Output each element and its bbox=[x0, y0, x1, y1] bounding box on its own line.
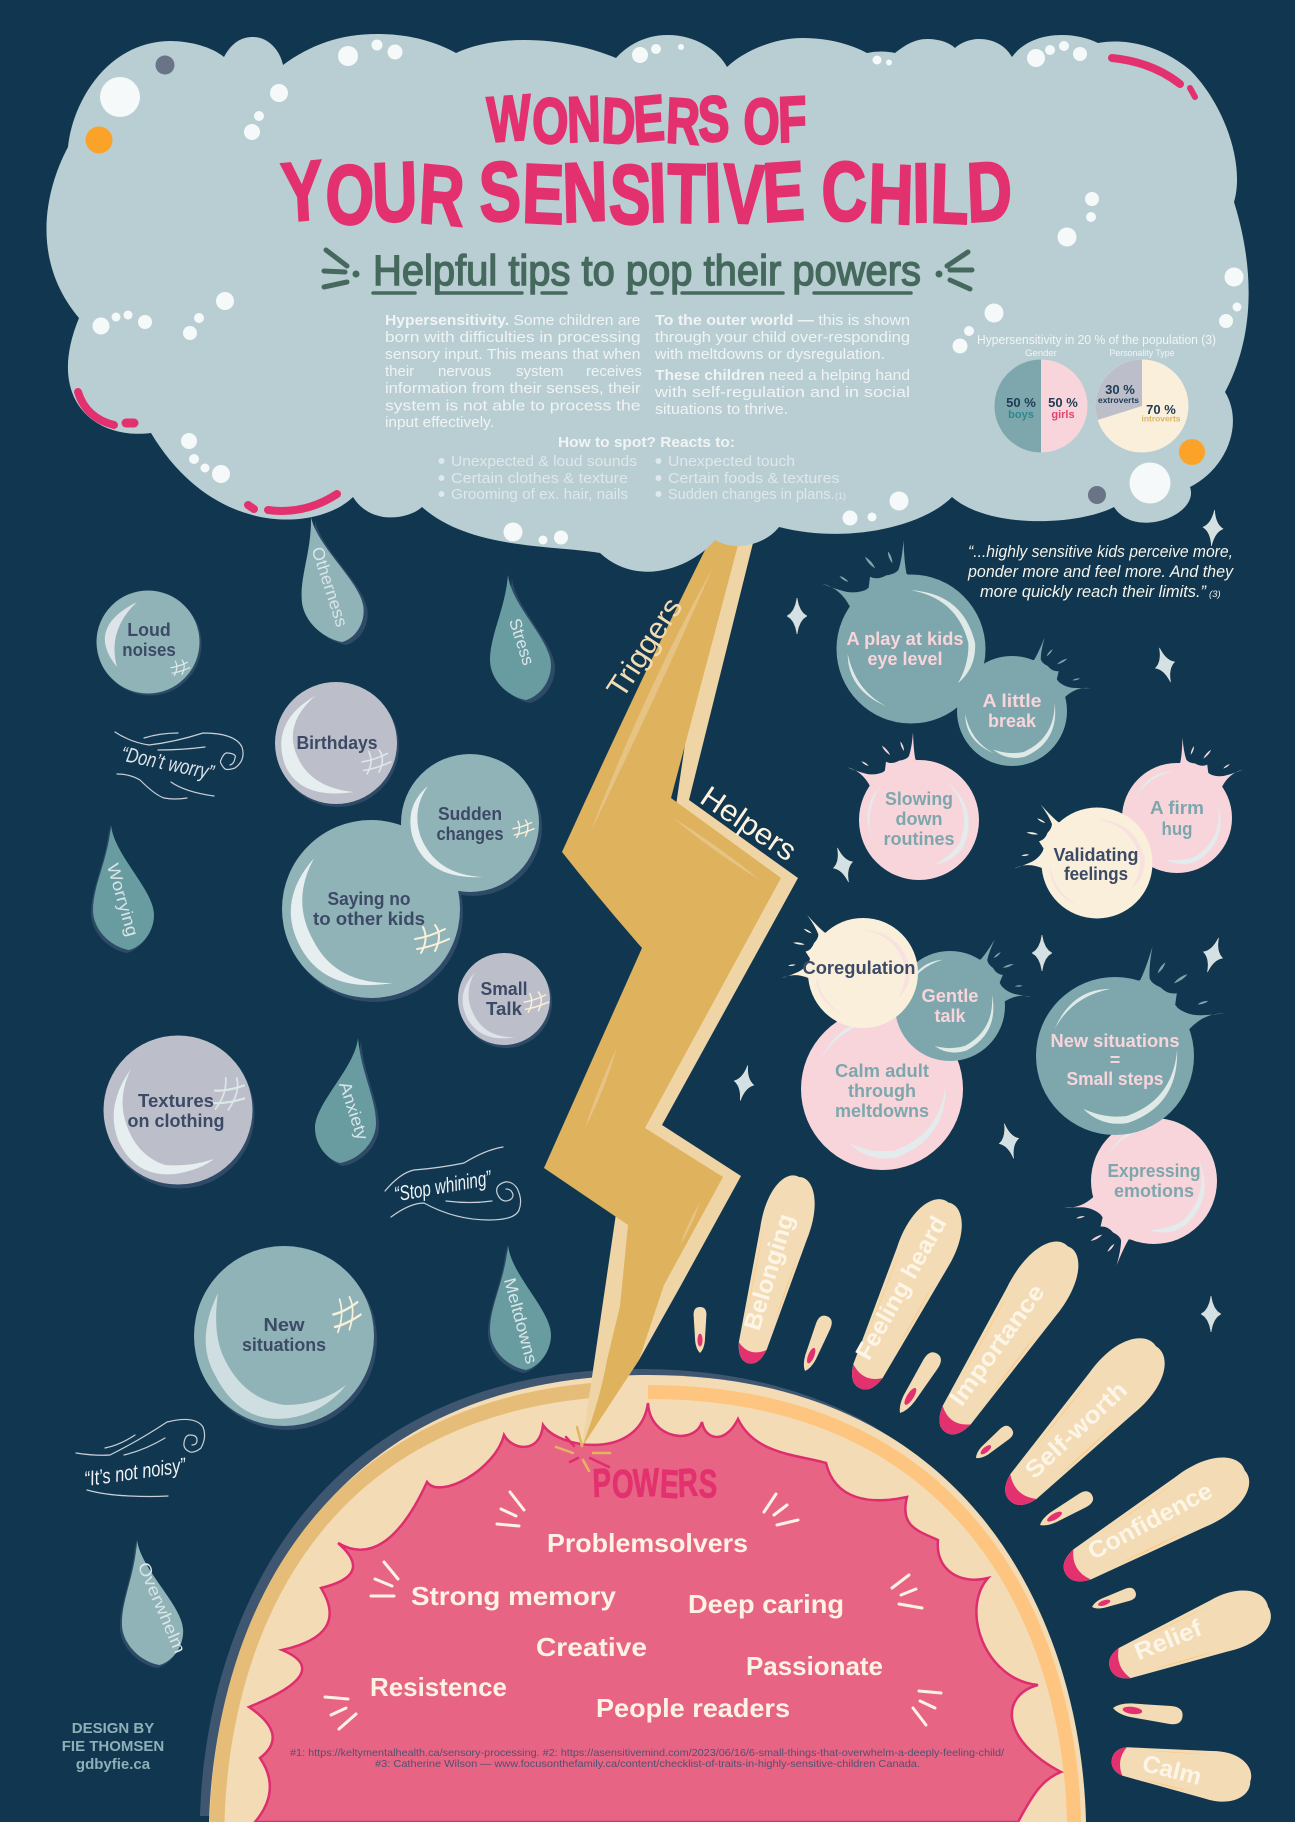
bubble: Expressing emotions: emotions bbox=[1114, 1181, 1194, 1201]
cloud panel bbox=[46, 34, 1249, 572]
drop: Worrying bbox=[91, 825, 154, 953]
bullets bbox=[438, 458, 662, 497]
speech: It's not noisy bbox=[76, 1419, 205, 1496]
pie: personality type: 70 % bbox=[1146, 402, 1176, 417]
drop: Worrying: Worrying bbox=[103, 861, 142, 939]
finger: Relief: Relief bbox=[1131, 1614, 1207, 1666]
text block: how to spot: (1) bbox=[835, 491, 846, 501]
footnotes: #3: Catherine Wilson — www.focusonthefamily.ca/content/checklist-of-traits-in-highly-sensitive-children Canada. bbox=[375, 1758, 920, 1770]
pie: gender: boys bbox=[1008, 409, 1034, 421]
text block: hypersensitivity: system bbox=[516, 363, 564, 380]
finger: Relief bbox=[1100, 1581, 1279, 1695]
text block: hypersensitivity: system is not able to process the bbox=[385, 398, 640, 414]
drop: Meltdowns: Meltdowns bbox=[500, 1276, 541, 1366]
finger: Calm bbox=[1108, 1735, 1254, 1806]
small fingers bbox=[694, 1307, 1184, 1725]
bolt label: Triggers: Triggers bbox=[601, 592, 689, 704]
text block: how to spot bbox=[438, 434, 846, 503]
cloud red accent strokes bbox=[78, 58, 1195, 511]
powers list bbox=[370, 1528, 883, 1723]
bubble: Gentle talk bbox=[895, 928, 1047, 1061]
bubble: A play at kids eye level bbox=[822, 540, 986, 724]
powers list: Resistence bbox=[370, 1672, 507, 1702]
pie: personality type: 30 % bbox=[1105, 382, 1135, 397]
bubble: Gentle talk: Gentle bbox=[922, 986, 978, 1006]
quote: more quickly reach their limits.” bbox=[980, 582, 1207, 601]
bubble: Textures on clothing bbox=[104, 1036, 254, 1188]
bubble: Textures on clothing: Textures bbox=[138, 1091, 214, 1111]
speech: Don't worry: “Don’t worry” bbox=[119, 743, 216, 785]
bubble: A little break: A little bbox=[982, 691, 1042, 711]
bubble: A firm hug: A firm bbox=[1150, 798, 1204, 818]
drop: Anxiety bbox=[315, 1038, 379, 1166]
bubble: Calm adult through meltdowns: Calm adult bbox=[835, 1061, 929, 1081]
bubble: New situations: situations bbox=[242, 1335, 326, 1355]
bubble: Slowing down routines: down bbox=[896, 809, 942, 829]
finger: Confidence bbox=[1051, 1444, 1260, 1600]
bubble: Slowing down routines bbox=[847, 732, 989, 880]
text block: hypersensitivity: born with difficulties in processing bbox=[385, 329, 640, 346]
pie: personality type: introverts bbox=[1142, 414, 1181, 424]
bubble: New situations bbox=[194, 1246, 377, 1430]
bubble: Loud noises bbox=[96, 590, 202, 696]
finger: Feeling heard bbox=[834, 1190, 974, 1400]
speech: Stop whining bbox=[385, 1147, 521, 1220]
text block: hypersensitivity: sensory input. This means that when bbox=[385, 346, 640, 363]
pie: personality type: extroverts bbox=[1098, 395, 1139, 405]
panel: powers dome bbox=[200, 1369, 1086, 1822]
finger: Self-worth bbox=[987, 1324, 1179, 1522]
bubble: Validating feelings: Validating bbox=[1054, 845, 1138, 865]
bubble: A little break: break bbox=[988, 711, 1037, 731]
text block: how to spot: Grooming of ex. hair, nails bbox=[451, 486, 628, 503]
helpers: A play at kids and A little break bbox=[822, 540, 1101, 766]
bubble: Validating feelings bbox=[994, 790, 1152, 918]
bubble: New situations = Small steps bbox=[1036, 938, 1236, 1135]
pie: gender bbox=[994, 360, 1088, 452]
powers list: Passionate bbox=[746, 1651, 883, 1681]
quote: ponder more and feel more. And they bbox=[967, 562, 1234, 581]
bubble: Calm adult through meltdowns: meltdowns bbox=[835, 1101, 929, 1121]
bubble: New situations: New bbox=[264, 1315, 306, 1335]
bubble: Gentle talk: talk bbox=[934, 1006, 966, 1026]
bubble: Textures on clothing: on clothing bbox=[128, 1111, 224, 1131]
bubble: Loud noises: noises bbox=[122, 640, 176, 660]
text block: hypersensitivity: input effectively. bbox=[385, 414, 494, 431]
bubble: Validating feelings: feelings bbox=[1064, 864, 1128, 884]
speech: Stop whining: “Stop whining” bbox=[393, 1167, 494, 1206]
sparkles bbox=[730, 509, 1228, 1332]
bubble: A firm hug bbox=[1122, 738, 1243, 873]
finger: Self-worth: Self-worth bbox=[1020, 1377, 1133, 1484]
credit: FIE THOMSEN bbox=[62, 1738, 164, 1755]
pie: gender: 50 % bbox=[1048, 395, 1078, 410]
text block: hypersensitivity: information from their senses, their bbox=[385, 380, 640, 397]
bubbles: Saying no and Sudden changes bbox=[282, 754, 542, 1002]
bubble: Sudden changes bbox=[401, 754, 539, 892]
text block: outer world: situations to thrive. bbox=[655, 401, 788, 418]
speech: Don't worry bbox=[115, 732, 243, 799]
text block: outer world: with meltdowns or dysregulation. bbox=[654, 346, 885, 363]
footnotes: #1: https://keltymentalhealth.ca/sensory-processing. #2: https://asensitivemind.com/2023/06/16/6-small-things-that-overwhelm-a-deeply-feeling-child/ bbox=[290, 1747, 1004, 1759]
text block: outer world: These children need a helping hand bbox=[655, 367, 910, 384]
bubble: A play at kids eye level: A play at kids bbox=[846, 629, 964, 649]
drop: Stress: Stress bbox=[505, 616, 538, 668]
bubble: Saying no: to other kids bbox=[313, 909, 425, 929]
bubble: Sudden changes: changes bbox=[436, 824, 504, 844]
bubble: Slowing down routines: Slowing bbox=[885, 789, 953, 809]
pie: gender: girls bbox=[1051, 409, 1075, 421]
subtitle left ticks bbox=[324, 250, 360, 287]
quote: (3) bbox=[1209, 589, 1221, 600]
text block: hypersensitivity: Hypersensitivity. Some children are bbox=[385, 312, 640, 329]
drop: Stress bbox=[490, 575, 555, 703]
bubble: Birthdays: Birthdays bbox=[296, 733, 378, 753]
bubble: Slowing down routines: routines bbox=[884, 829, 954, 849]
title bbox=[278, 82, 1014, 243]
chart: hypersensitivity pies bbox=[977, 332, 1216, 452]
finger: Feeling heard: Feeling heard bbox=[851, 1212, 952, 1365]
finger: Importance: Importance bbox=[944, 1280, 1050, 1411]
pie: personality type bbox=[1096, 360, 1188, 452]
bubble: Saying no: Saying no bbox=[328, 889, 410, 909]
drop: Otherness bbox=[293, 517, 371, 645]
text block: outer world: through your child over-responding bbox=[655, 329, 910, 346]
powers list: Deep caring bbox=[688, 1589, 844, 1619]
bubble: Expressing emotions: Expressing bbox=[1108, 1161, 1200, 1181]
credit bbox=[62, 1720, 164, 1773]
text block: outer world bbox=[654, 312, 910, 418]
bubble: Sudden changes: Sudden bbox=[438, 804, 502, 824]
bubble: New situations = Small steps: Small steps bbox=[1066, 1069, 1164, 1089]
title line 2: YOUR SENSITIVE CHILD bbox=[278, 143, 1014, 243]
powers list: Problemsolvers bbox=[547, 1528, 748, 1558]
text block: hypersensitivity: their bbox=[385, 363, 414, 380]
pink scalloped centre bbox=[249, 1403, 1061, 1822]
bubble: A play at kids eye level: eye level bbox=[868, 649, 942, 669]
bubble: New situations = Small steps: New situations bbox=[1050, 1031, 1180, 1051]
text block: how to spot: Sudden changes in plans. bbox=[668, 486, 834, 503]
credit: gdbyfie.ca bbox=[76, 1756, 151, 1773]
powers burst ticks bbox=[325, 1492, 941, 1729]
pie: gender: 50 % bbox=[1006, 395, 1036, 410]
speech: It's not noisy: “It’s not noisy” bbox=[83, 1454, 188, 1491]
text block: how to spot: Unexpected & loud sounds bbox=[451, 453, 637, 470]
chart: hypersensitivity pies: Hypersensitivity in 20 % of the population (3) bbox=[977, 332, 1216, 347]
finger: Importance bbox=[921, 1230, 1092, 1448]
drop: Overwhelm: Overwhelm bbox=[134, 1559, 189, 1656]
finger: Belonging bbox=[724, 1170, 823, 1370]
bubble: Small Talk: Small bbox=[480, 979, 528, 999]
text block: outer world: with self-regulation and in social bbox=[654, 384, 910, 401]
drop: Anxiety: Anxiety bbox=[335, 1079, 372, 1143]
bubble: Saying no bbox=[282, 820, 460, 998]
text block: hypersensitivity bbox=[385, 312, 642, 431]
impact spark at bolt tip bbox=[556, 1427, 610, 1471]
finger: Belonging: Belonging bbox=[739, 1211, 800, 1333]
bubble: Coregulation bbox=[761, 901, 918, 1028]
subtitle right ticks bbox=[936, 252, 972, 289]
powers list: Creative bbox=[536, 1632, 647, 1662]
cloud decorative dots bbox=[86, 40, 1244, 544]
text block: hypersensitivity: receives bbox=[586, 363, 642, 380]
title line 1: WONDERS OF bbox=[485, 82, 807, 158]
quote bbox=[967, 542, 1234, 601]
bolt label: Helpers: Helpers bbox=[694, 780, 802, 868]
quote: “...highly sensitive kids perceive more, bbox=[968, 542, 1233, 561]
text block: how to spot: Unexpected touch bbox=[668, 453, 795, 470]
lightning bolt bbox=[544, 530, 798, 1447]
bubble: Loud noises: Loud bbox=[127, 620, 171, 640]
subtitle underlines bbox=[373, 291, 911, 295]
finger: Calm: Calm bbox=[1140, 1750, 1204, 1791]
chart: hypersensitivity pies: Personality Type bbox=[1110, 348, 1174, 359]
text block: how to spot: Certain foods & textures bbox=[668, 470, 840, 487]
bubble: Small Talk: Talk bbox=[486, 999, 523, 1019]
text block: how to spot: How to spot? Reacts to: bbox=[558, 434, 735, 451]
bubble: Expressing emotions bbox=[1052, 1118, 1224, 1274]
drop: Otherness: Otherness bbox=[308, 544, 351, 629]
bubble: A little break bbox=[957, 630, 1101, 766]
footnotes bbox=[290, 1747, 1004, 1770]
bubble: Coregulation: Coregulation bbox=[802, 958, 916, 978]
drop: Overwhelm bbox=[117, 1540, 189, 1668]
bubble: Calm adult through meltdowns bbox=[801, 1008, 963, 1170]
bubble: Small Talk bbox=[458, 953, 552, 1048]
powers list: People readers bbox=[596, 1693, 790, 1723]
credit: DESIGN BY bbox=[72, 1720, 154, 1737]
bubble: Calm adult through meltdowns: through bbox=[848, 1081, 916, 1101]
bubble: A firm hug: hug bbox=[1162, 819, 1192, 839]
finger: Confidence: Confidence bbox=[1083, 1477, 1217, 1566]
heading: POWERS: POWERS bbox=[591, 1461, 718, 1507]
text block: hypersensitivity: nervous bbox=[438, 363, 491, 380]
chart: hypersensitivity pies: Gender bbox=[1025, 348, 1057, 359]
text block: outer world: To the outer world — this is shown bbox=[655, 312, 910, 329]
powers list: Strong memory bbox=[411, 1581, 617, 1611]
bubble: New situations = Small steps: = bbox=[1110, 1050, 1120, 1070]
drop: Meltdowns bbox=[488, 1245, 551, 1373]
subtitle: Helpful tips to pop their powers bbox=[373, 247, 921, 295]
bubble: Birthdays bbox=[275, 682, 399, 807]
text block: how to spot: Certain clothes & texture bbox=[451, 470, 628, 487]
